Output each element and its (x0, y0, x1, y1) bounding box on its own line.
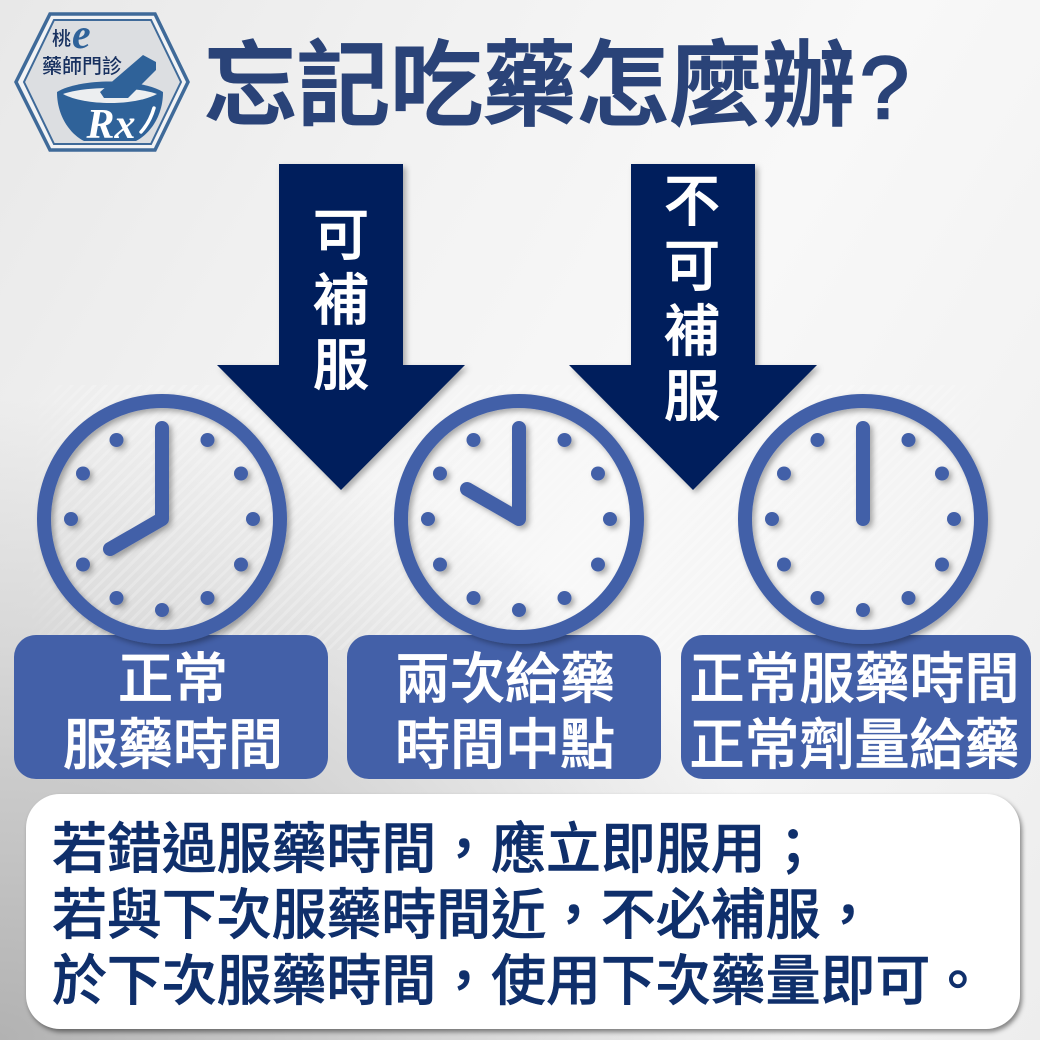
clock: 12 o'clock (745, 401, 981, 637)
background stripes behind clocks (25, 385, 1000, 650)
logo: mortar and pestle hexagon badge (14, 12, 190, 152)
arrow text: 補 (664, 300, 720, 363)
arrow text: 可 (664, 235, 720, 298)
clock: 10 o'clock (401, 401, 637, 637)
advice panel (26, 794, 1020, 1029)
advice text: 若與下次服藥時間近，不必補服， (52, 884, 875, 946)
logo: mortar and pestle hexagon badge: 桃 (52, 28, 71, 50)
arrow text: 服 (313, 334, 369, 397)
arrow: can make up dose (217, 164, 468, 494)
title: 忘記吃藥怎麼辦? (204, 34, 909, 138)
arrow text: 可 (313, 204, 369, 267)
clocks (36, 394, 994, 650)
advice text (52, 818, 985, 1012)
arrow: cannot make up dose (569, 164, 820, 494)
label: midpoint between doses: 時間中點 (395, 714, 615, 776)
label: normal dosing time: 服藥時間 (63, 714, 283, 776)
arrow text: 補 (313, 269, 369, 332)
label: midpoint between doses: 兩次給藥 (395, 648, 615, 710)
arrow text: 不 (664, 170, 720, 233)
arrow text: 服 (664, 365, 720, 428)
clock: 8 o'clock (44, 401, 280, 637)
arrow text (313, 204, 369, 397)
arrow text (664, 170, 720, 428)
logo: mortar and pestle hexagon badge: e (72, 12, 91, 58)
label: midpoint between doses (347, 635, 661, 779)
advice text: 於下次服藥時間，使用下次藥量即可。 (52, 950, 985, 1012)
label: normal dosing time (14, 635, 328, 779)
logo: mortar and pestle hexagon badge: 藥師門診 (42, 55, 122, 78)
logo: mortar and pestle hexagon badge: Rx (85, 102, 136, 148)
advice text: 若錯過服藥時間，應立即服用； (52, 818, 820, 880)
label: normal dosing time: 正常 (118, 648, 228, 710)
label: normal time normal dose: 正常服藥時間 (689, 648, 1020, 710)
label: normal time normal dose: 正常劑量給藥 (689, 714, 1020, 776)
label: normal time normal dose (681, 635, 1031, 779)
